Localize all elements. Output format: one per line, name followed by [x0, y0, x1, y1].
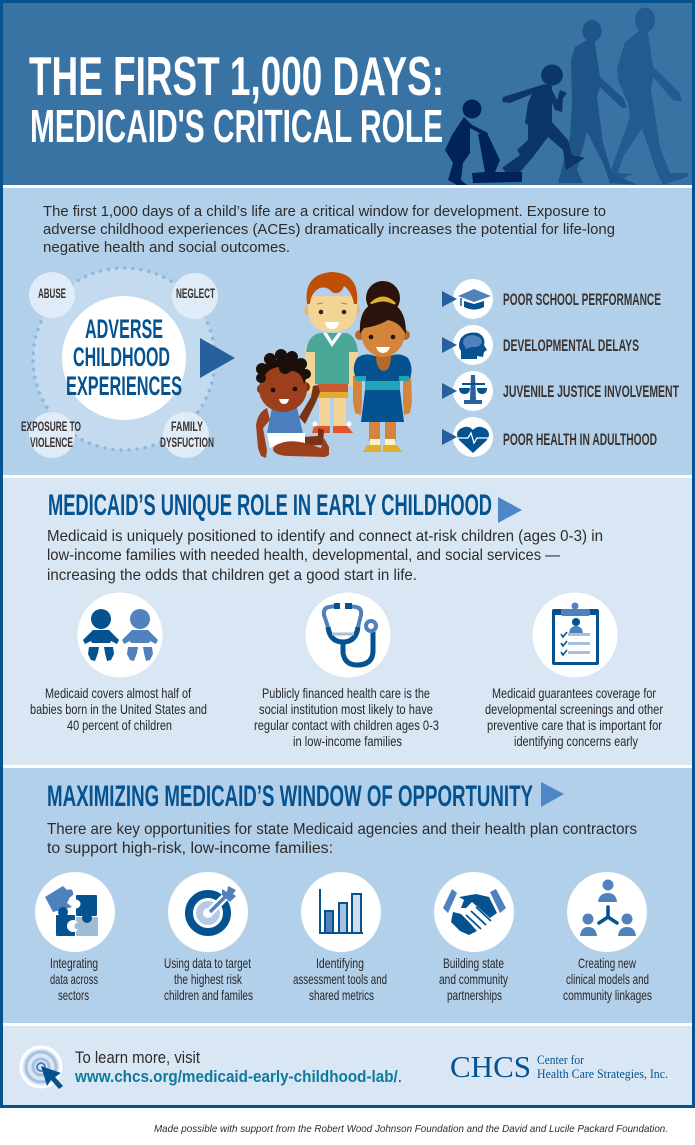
- caption: [30, 685, 207, 733]
- caption: Integrating: [50, 955, 98, 971]
- column: assessment tools: [293, 872, 387, 1003]
- icon: stethoscope: [324, 603, 376, 665]
- body text: [47, 528, 603, 584]
- arrow: section heading: [541, 782, 564, 807]
- caption: shared metrics: [309, 987, 374, 1003]
- list: outcomes: [442, 279, 679, 457]
- panel: header: [3, 3, 692, 185]
- ACE labels: [21, 285, 215, 450]
- diagram: ACE cycle: [21, 268, 218, 458]
- column: using data: [164, 872, 253, 1003]
- panel: adverse childhood experiences: [3, 188, 692, 475]
- caption: Identifying: [316, 955, 364, 971]
- caption: data across: [50, 971, 98, 987]
- body text: Medicaid is uniquely positioned to identify and connect at-risk children (ages 0-3) in: [47, 528, 603, 545]
- caption: children and familes: [164, 987, 253, 1003]
- illustration: girl: [353, 281, 412, 452]
- ACE center label: EXPERIENCES: [66, 371, 182, 401]
- title: THE FIRST 1,000 DAYS:: [29, 45, 444, 107]
- ACE labels: FAMILY: [171, 418, 203, 434]
- logo: CHCS: Health Care Strategies, Inc.: [537, 1067, 668, 1081]
- caption: babies born in the United States and: [30, 701, 207, 717]
- ACE center label: ADVERSE: [85, 314, 163, 344]
- intro text: negative health and social outcomes.: [43, 239, 290, 256]
- caption: assessment tools and: [293, 971, 387, 987]
- footnote: Made possible with support from the Robert Wood Johnson Foundation and the David and Lucile Packard Foundation.: [154, 1123, 668, 1135]
- title: [29, 45, 444, 152]
- ACE labels: DYSFUCTION: [160, 434, 214, 450]
- icon: walking adult silhouette, left: [558, 20, 637, 185]
- caption: Building state: [443, 955, 504, 971]
- column: clinical models: [563, 872, 652, 1003]
- ACE labels: VIOLENCE: [30, 434, 73, 450]
- icon: clipboard: [552, 602, 599, 665]
- caption: 40 percent of children: [67, 717, 172, 733]
- intro text: The first 1,000 days of a child’s life are a critical window for development. Exposure to: [43, 203, 606, 220]
- icon: toddler on scooter silhouette: [445, 100, 522, 185]
- body text: increasing the odds that children get a good start in life.: [47, 567, 417, 584]
- outcome: poor health in adulthood: [442, 417, 657, 457]
- panel: Medicaid's unique role: [3, 478, 692, 765]
- caption: Using data to target: [164, 955, 251, 971]
- caption: identifying concerns early: [514, 733, 638, 749]
- caption: partnerships: [447, 987, 502, 1003]
- body text: low-income families with needed health, developmental, and social services —: [47, 547, 560, 564]
- caption: [485, 685, 663, 749]
- caption: [439, 955, 508, 1003]
- body text: There are key opportunities for state Medicaid agencies and their health plan contractors: [47, 821, 637, 838]
- logo: CHCS: Center for: [537, 1053, 585, 1067]
- outcome: juvenile justice involvement: [442, 371, 679, 411]
- caption: Publicly financed health care is the: [262, 685, 430, 701]
- caption: [254, 685, 439, 749]
- arrow: ACE to children: [200, 338, 235, 378]
- caption: [293, 955, 387, 1003]
- ACE center label: CHILDHOOD: [73, 342, 170, 372]
- caption: social institution most likely to have: [259, 701, 433, 717]
- illustration: baby: [256, 349, 329, 458]
- column: health care: [254, 592, 439, 749]
- call to action: To learn more, visit: [75, 1048, 200, 1067]
- icon: target: [189, 886, 236, 932]
- logo: CHCS: [450, 1049, 668, 1084]
- call to action: [74, 1048, 402, 1086]
- icon: handshake: [443, 889, 506, 935]
- logo: CHCS: CHCS: [450, 1049, 531, 1084]
- icon: cursor click: [21, 1047, 63, 1089]
- column: babies: [30, 592, 207, 733]
- call to action: www.chcs.org/medicaid-early-childhood-lab/.: [74, 1067, 402, 1086]
- caption: Creating new: [578, 955, 637, 971]
- ACE labels: EXPOSURE TO: [21, 418, 81, 434]
- illustration: boy: [304, 272, 360, 433]
- caption: and community: [439, 971, 508, 987]
- outcome: poor school performance: [442, 279, 661, 319]
- outcome: developmental delays: [442, 325, 639, 365]
- caption: [164, 955, 253, 1003]
- intro text: adverse childhood experiences (ACEs) dramatically increases the potential for life-long: [43, 221, 615, 238]
- body text: [47, 821, 637, 857]
- caption: community linkages: [563, 987, 652, 1003]
- ACE labels: ABUSE: [38, 285, 66, 301]
- icon: two babies: [83, 609, 158, 661]
- icon: puzzle pieces: [45, 886, 98, 936]
- caption: sectors: [58, 987, 89, 1003]
- icon: running child silhouette: [502, 64, 585, 181]
- arrow: section heading: [498, 497, 522, 523]
- title: MEDICAID'S CRITICAL ROLE: [30, 100, 443, 152]
- intro text: [43, 203, 615, 256]
- caption: clinical models and: [566, 971, 649, 987]
- caption: in low-income families: [293, 733, 402, 749]
- icon: connected people: [580, 880, 636, 936]
- caption: Medicaid covers almost half of: [45, 685, 191, 701]
- caption: the highest risk: [174, 971, 243, 987]
- icon: walking adult silhouette, right: [610, 8, 688, 185]
- icon: bar chart: [320, 889, 363, 933]
- panel: window of opportunity: [3, 768, 692, 1023]
- caption: [50, 955, 98, 1003]
- body text: to support high-risk, low-income families:: [47, 840, 333, 857]
- column: coverage: [485, 592, 663, 749]
- ACE center label: [66, 314, 182, 401]
- column: integrating data: [35, 872, 115, 1003]
- panel: learn more: [3, 1026, 692, 1105]
- caption: regular contact with children ages 0-3: [254, 717, 439, 733]
- column: partnerships: [434, 872, 514, 1003]
- caption: [563, 955, 652, 1003]
- ACE labels: NEGLECT: [176, 285, 215, 301]
